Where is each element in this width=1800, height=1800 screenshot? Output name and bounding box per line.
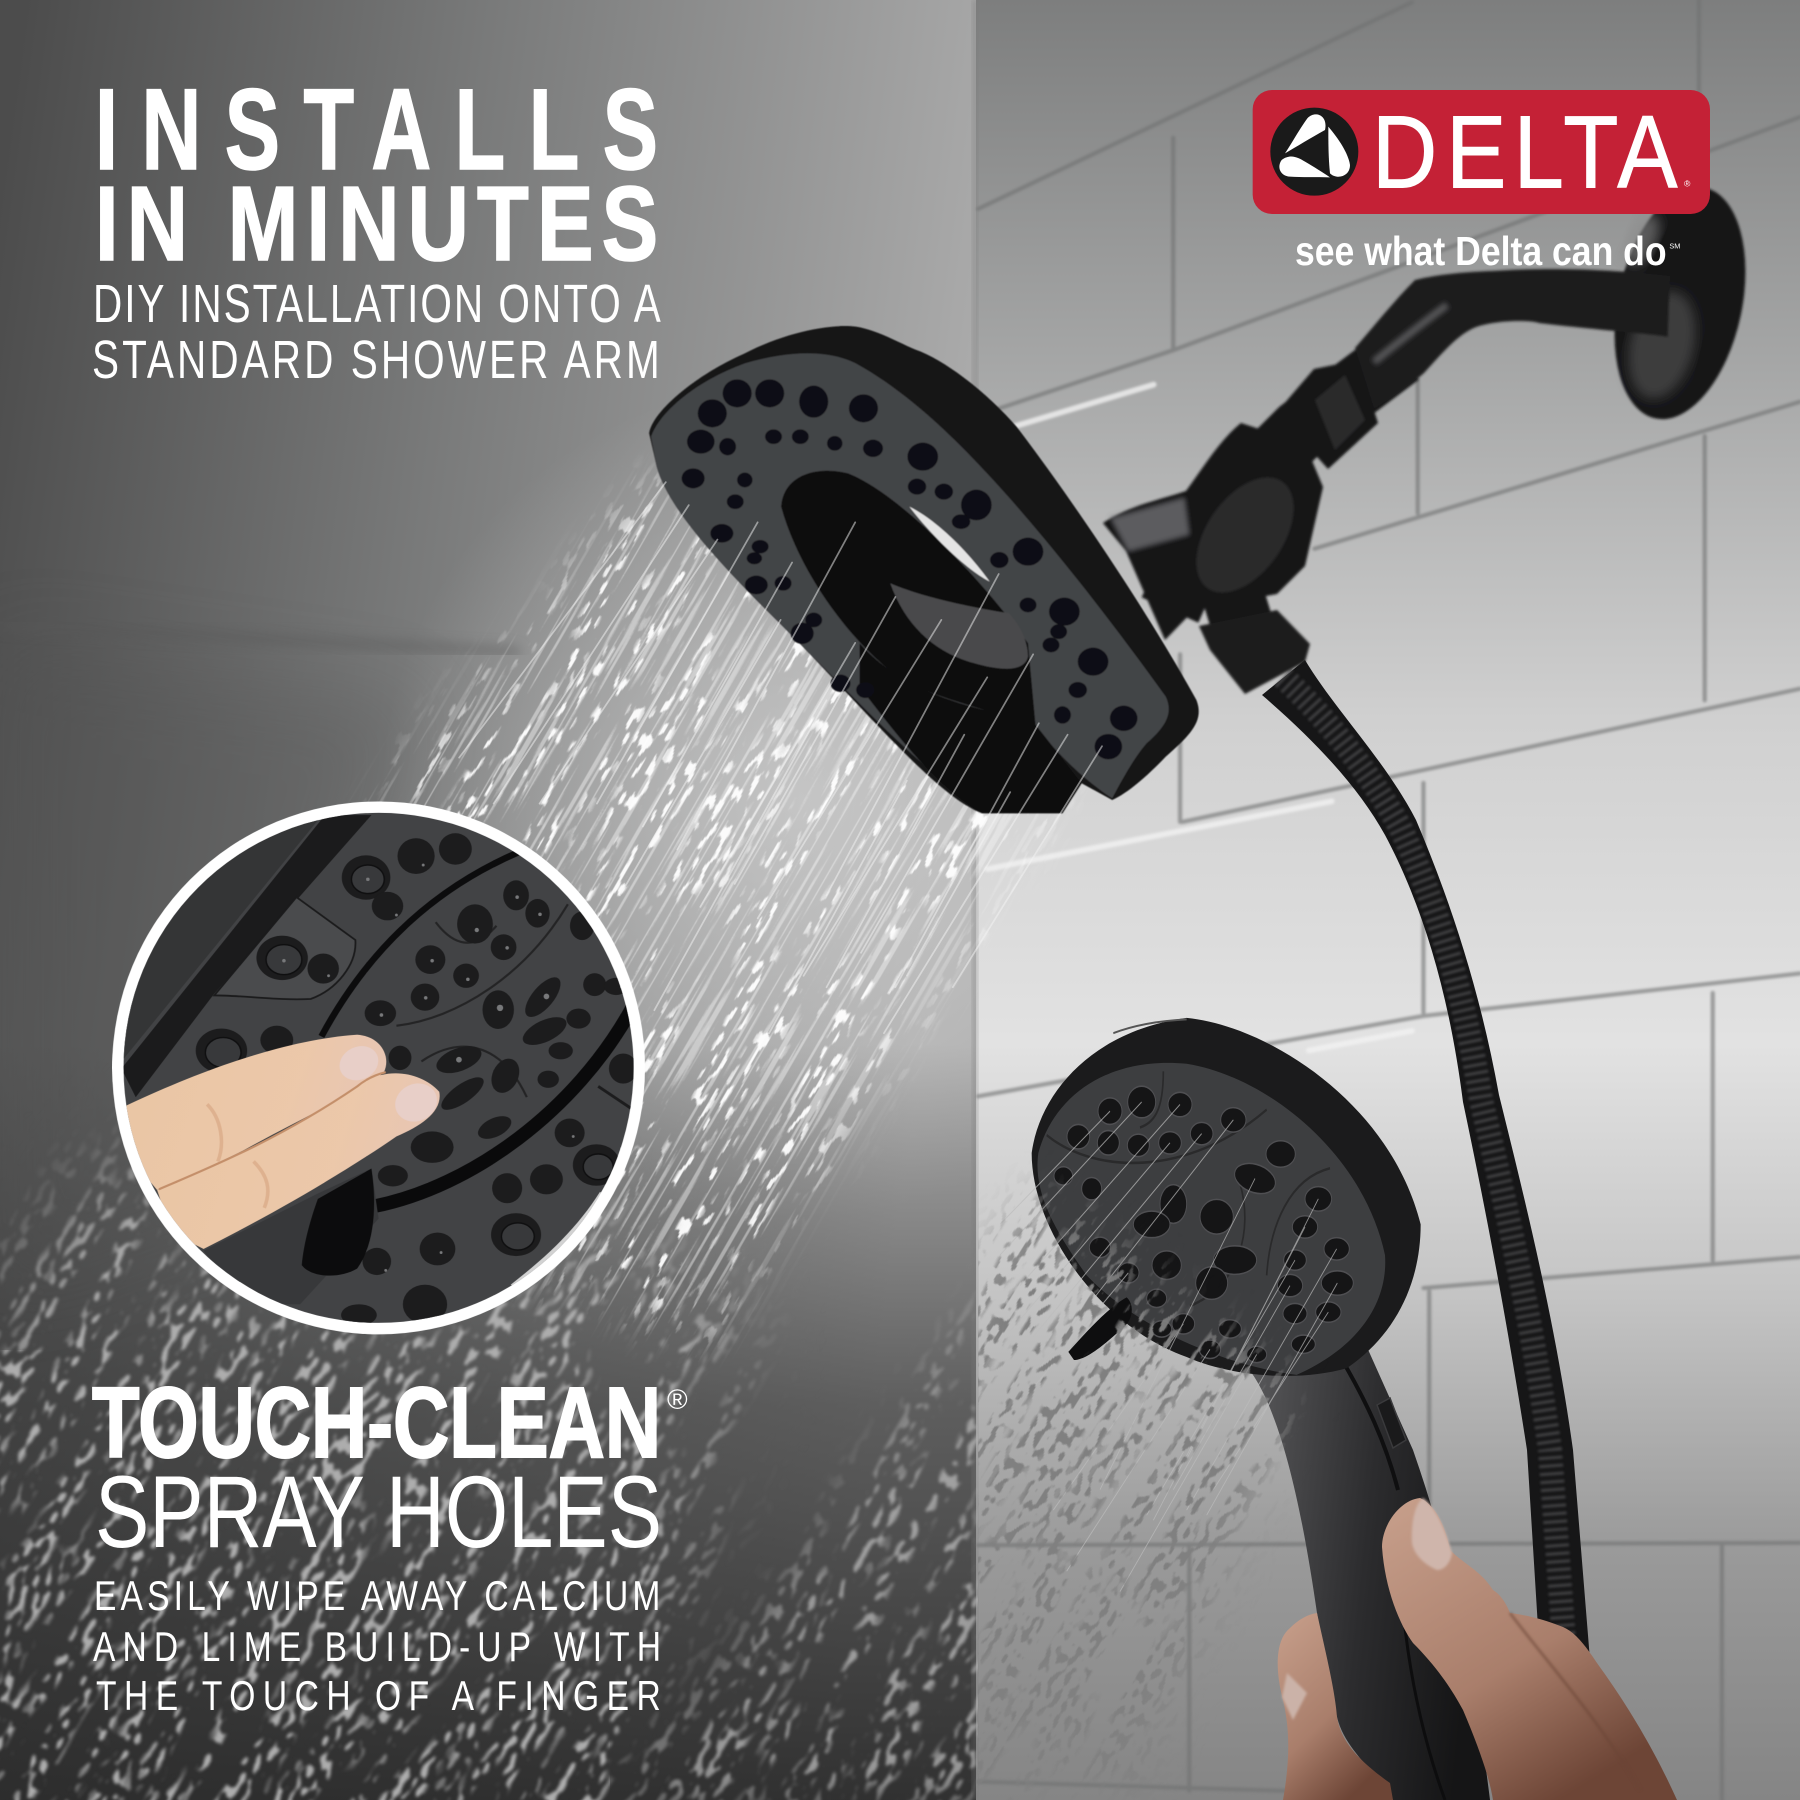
head body xyxy=(649,326,1199,813)
inner sleeve xyxy=(890,583,1028,669)
hand shower nozzles xyxy=(1054,1086,1353,1363)
inset lower plate wedge xyxy=(204,1169,379,1304)
text: touch-clean description xyxy=(93,1574,661,1720)
inset nozzle inner rings xyxy=(205,865,613,1250)
logo red badge xyxy=(1253,90,1710,214)
text: touch-clean description: THE TOUCH OF A FINGER xyxy=(96,1674,661,1720)
water spray from rain head: bright dotted streaks xyxy=(364,466,1047,1358)
hand shower spray over light wall xyxy=(978,1180,1295,1764)
text: DIY installation description: DIY INSTALLATION ONTO A xyxy=(93,274,661,334)
solid core joining arm and mount xyxy=(1170,355,1400,650)
water spray from rain head: fine streaks xyxy=(368,478,1037,1350)
rain head water streaks xyxy=(459,482,1102,1033)
text: touch-clean description: EASILY WIPE AWAY CALCIUM xyxy=(94,1574,660,1620)
background: left shower wall xyxy=(0,0,1220,1800)
center opening xyxy=(781,471,1036,727)
inset nozzles xyxy=(196,833,637,1326)
head face plate xyxy=(651,353,1169,803)
inset white ring xyxy=(112,801,645,1334)
opening highlight xyxy=(909,507,990,582)
text: touch-clean description: AND LIME BUILD-UP WITH xyxy=(93,1625,661,1671)
heading: installs in minutes: INSTALLS xyxy=(95,66,658,194)
hose nut xyxy=(1199,610,1310,694)
inset nozzle plate xyxy=(121,811,636,1326)
heading: touch-clean spray holes: TOUCH-CLEAN xyxy=(92,1367,661,1479)
hand shower jets xyxy=(1000,1102,1337,1592)
head nozzles xyxy=(682,379,1137,759)
Delta logo: SM xyxy=(1669,241,1680,250)
Delta logo xyxy=(1253,90,1710,274)
hand shower head rim xyxy=(1032,1018,1421,1376)
heading: installs in minutes xyxy=(95,66,658,283)
inset sliding selector tab xyxy=(302,1169,374,1276)
heading: touch-clean spray holes xyxy=(92,1367,688,1569)
heading: installs in minutes: IN MINUTES xyxy=(95,165,658,283)
spray selector lever xyxy=(1068,1297,1132,1360)
threaded collar xyxy=(1277,360,1378,469)
hand shower xyxy=(1000,1018,1421,1592)
text: DIY installation description: STANDARD SHOWER ARM xyxy=(92,330,660,390)
logo wordmark: DELTA xyxy=(1372,95,1678,210)
Delta logo: ® xyxy=(1684,179,1691,189)
shower arm, wall flange and mount xyxy=(1103,175,1765,694)
curved shower arm xyxy=(1355,269,1670,409)
lower gloss band xyxy=(860,643,1082,813)
logo icon: black circle with white drops xyxy=(1270,108,1358,196)
thumb and palm xyxy=(1382,1498,1677,1800)
text: DIY installation description xyxy=(92,274,661,390)
lower fingers xyxy=(1278,1613,1393,1800)
heading: touch-clean spray holes: SPRAY HOLES xyxy=(95,1455,662,1569)
hand gripping the handle xyxy=(1278,1498,1677,1800)
flexible hose xyxy=(1262,660,1590,1660)
background: tiled right wall xyxy=(972,0,1800,1800)
diverter mount body xyxy=(1103,423,1323,640)
hand shower spray face xyxy=(1037,1063,1385,1375)
thumbnail xyxy=(1412,1498,1452,1570)
heading: touch-clean spray holes: ® xyxy=(667,1384,688,1415)
fingernail xyxy=(1282,1673,1307,1720)
water spray from rain head: droplets xyxy=(0,1138,770,1800)
wall flange xyxy=(1595,175,1765,431)
rain shower head xyxy=(649,326,1199,813)
inset two fingers xyxy=(121,1035,443,1249)
water spray from hand shower: droplets over dark wall xyxy=(639,1299,978,1800)
inset circle: touch-clean close-up xyxy=(112,801,645,1334)
hand shower handle xyxy=(1251,1345,1490,1800)
logo tagline: see what Delta can do xyxy=(1295,228,1667,274)
